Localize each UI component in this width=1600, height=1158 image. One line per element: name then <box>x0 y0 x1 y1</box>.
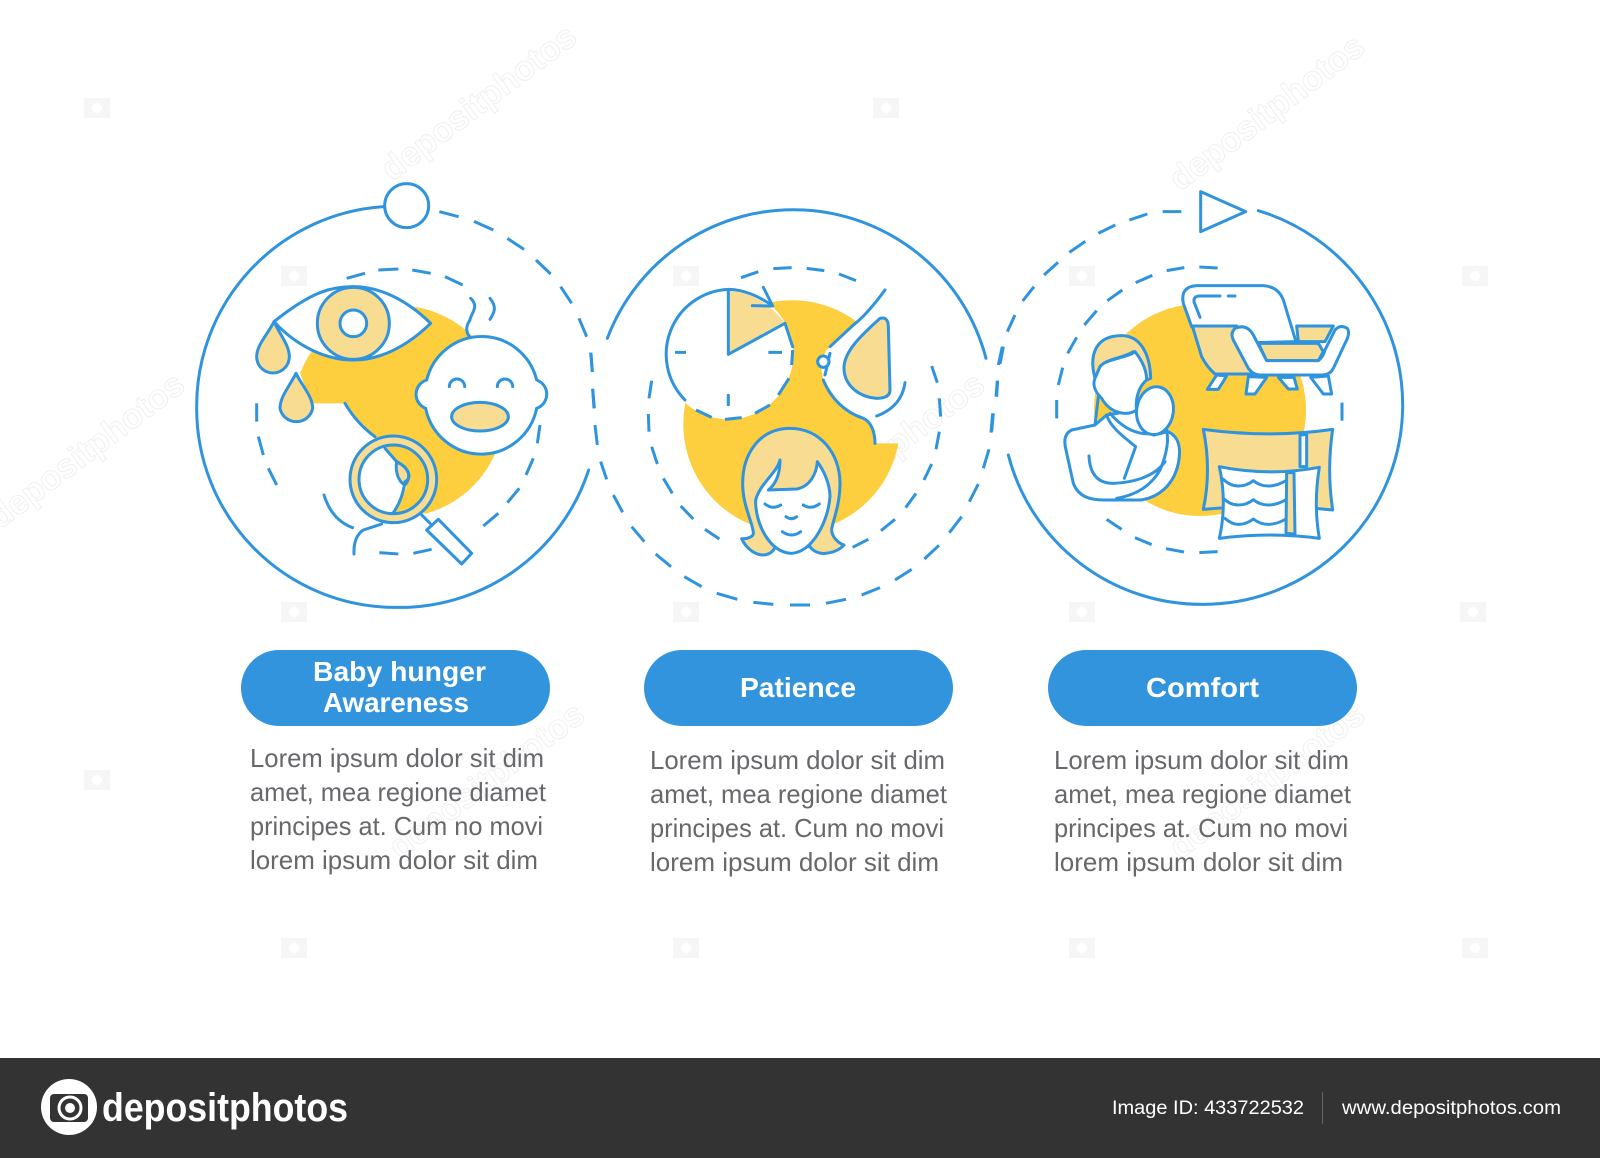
brand name: depositphotos <box>102 1086 348 1130</box>
text block: patience: Lorem ipsum dolor sit dim <box>650 745 945 775</box>
icon: magnifier over breast <box>324 403 472 564</box>
outer ring dashed arc <box>439 212 594 408</box>
watermark: depositphotos <box>382 695 592 866</box>
watermark: depositphotos <box>1162 695 1372 866</box>
icon: crying eye <box>257 287 431 422</box>
icon: calm woman face <box>742 428 844 555</box>
label pill: baby hunger awareness <box>241 650 550 726</box>
watermark <box>0 17 1488 958</box>
start triangle marker <box>1201 192 1246 232</box>
icon: clock <box>663 287 793 419</box>
text block: baby hunger awareness <box>250 743 547 875</box>
watermark: depositphotos <box>374 17 584 188</box>
label pill: comfort <box>1048 650 1357 726</box>
outer ring dashed arc <box>591 347 1002 605</box>
outer ring solid arc <box>1008 211 1403 604</box>
label pill: patience: Patience <box>740 672 856 703</box>
label pill: baby hunger awareness: Awareness <box>323 687 469 718</box>
label pill: comfort: Comfort <box>1146 672 1259 703</box>
text block: patience <box>650 745 948 877</box>
yellow circle <box>1094 304 1306 516</box>
text block: baby hunger awareness: lorem ipsum dolor sit dim <box>250 845 538 875</box>
inner dashed ring <box>257 269 540 554</box>
icon: crying baby face <box>416 298 547 454</box>
panel: comfort illustration <box>992 192 1403 604</box>
text block: comfort: Lorem ipsum dolor sit dim <box>1054 745 1349 775</box>
watermark: depositphotos <box>782 365 992 536</box>
panel: baby hunger awareness illustration <box>197 184 594 607</box>
yellow blob <box>300 306 504 513</box>
start marker circle <box>385 184 429 228</box>
website url: www.depositphotos.com <box>1341 1098 1561 1119</box>
text block: patience: principes at. Cum no movi <box>650 813 944 843</box>
label pill: baby hunger awareness: Baby hunger <box>313 656 486 687</box>
outer ring dashed arc <box>992 212 1181 432</box>
icon: pillows <box>1203 429 1333 538</box>
text block: baby hunger awareness: principes at. Cum no movi <box>250 811 543 841</box>
text block: patience: amet, mea regione diamet <box>650 779 948 809</box>
outer ring solid arc <box>607 210 986 358</box>
inner dashed ring <box>1057 267 1342 553</box>
text block: comfort: principes at. Cum no movi <box>1054 813 1348 843</box>
outer ring solid arc <box>197 207 589 607</box>
icon: mother holding baby <box>1065 336 1180 500</box>
icon: armchair <box>1183 286 1349 394</box>
footer bar <box>0 1058 1600 1158</box>
icon: breast <box>818 290 905 443</box>
inner dashed ring <box>648 268 941 547</box>
text block: patience: lorem ipsum dolor sit dim <box>650 847 939 877</box>
yellow blob <box>683 300 898 533</box>
watermark: depositphotos <box>1162 27 1372 198</box>
label pill: patience <box>644 650 953 726</box>
text block: baby hunger awareness: amet, mea regione diamet <box>250 777 547 807</box>
text block: baby hunger awareness: Lorem ipsum dolor sit dim <box>250 743 544 773</box>
text block: comfort: lorem ipsum dolor sit dim <box>1054 847 1343 877</box>
icon: depositphotos logo <box>41 1079 97 1135</box>
text block: comfort <box>1054 745 1352 877</box>
image id: Image ID: 433722532 <box>1112 1098 1304 1119</box>
panel: patience illustration <box>591 210 1002 605</box>
text block: comfort: amet, mea regione diamet <box>1054 779 1352 809</box>
